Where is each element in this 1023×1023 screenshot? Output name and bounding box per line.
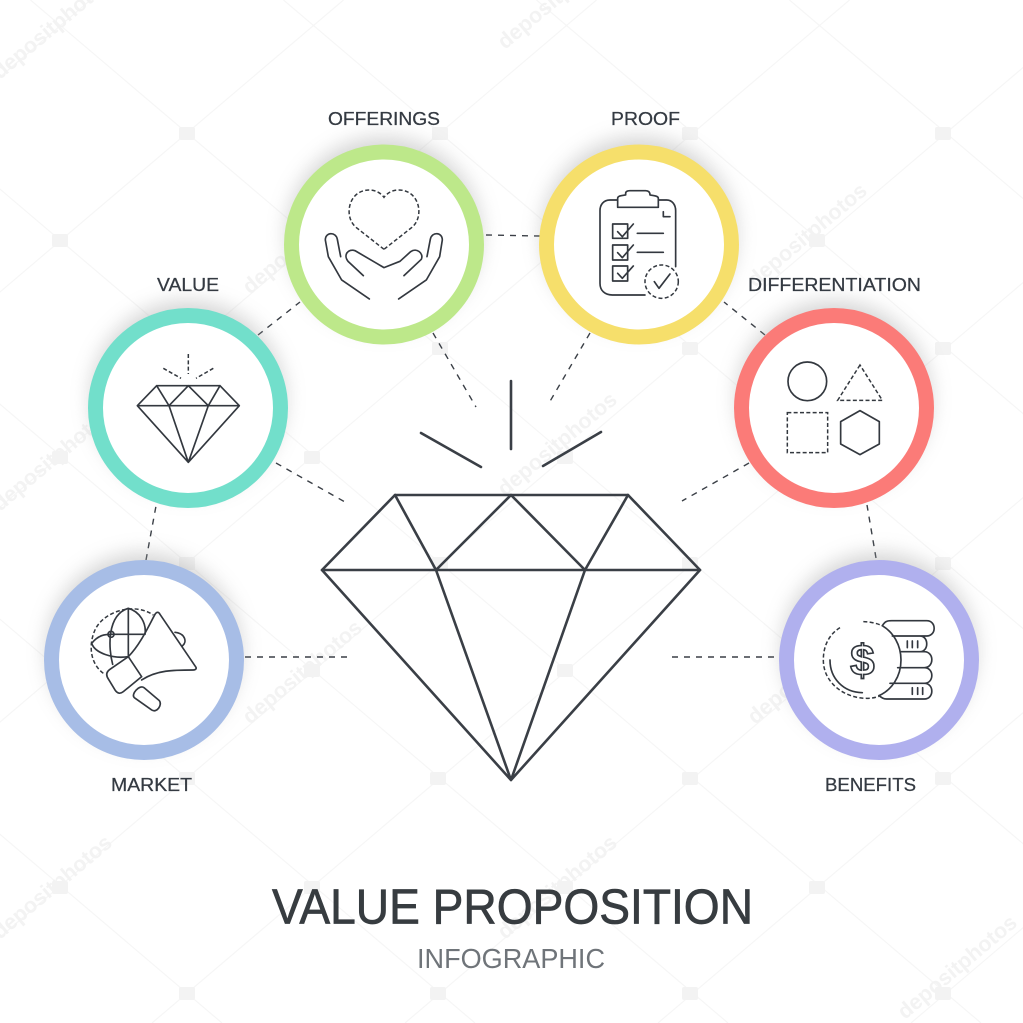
- text: depositphotos: [743, 615, 872, 729]
- circle: value: [91, 301, 285, 500]
- diamond sparkle rays: [421, 381, 601, 467]
- label: proof: PROOF: [611, 109, 680, 129]
- icon: globe and megaphone: [91, 608, 196, 711]
- label: offerings: OFFERINGS: [328, 109, 440, 129]
- circle: proof: [542, 137, 736, 337]
- circle: offerings: [287, 137, 481, 337]
- label: benefits: BENEFITS: [825, 775, 916, 795]
- icon: heart in hands: [325, 190, 442, 299]
- label: differentiation: DIFFERENTIATION: [748, 275, 921, 295]
- circle: benefits: [782, 553, 976, 752]
- text: depositphotos: [238, 615, 367, 729]
- icon: dollar coin and stack: $: [850, 637, 875, 686]
- subtitle: INFOGRAPHIC: [417, 943, 605, 974]
- text: depositphotos: [493, 830, 622, 944]
- text: depositphotos: [743, 178, 872, 292]
- icon: four shapes: [787, 362, 882, 455]
- icon: small diamond: [137, 354, 239, 462]
- circle: differentiation: [737, 301, 931, 500]
- title: VALUE PROPOSITION: [272, 880, 753, 934]
- text: depositphotos: [238, 185, 367, 299]
- label: value: VALUE: [157, 275, 219, 295]
- text: depositphotos: [493, 387, 622, 501]
- text: depositphotos: [893, 910, 1022, 1023]
- dashed connector lines: [146, 235, 876, 657]
- icon: dollar coin and stack: [823, 621, 934, 699]
- icon: clipboard checklist: [600, 191, 678, 298]
- circle: market: [47, 553, 241, 752]
- label: market: MARKET: [111, 775, 192, 795]
- central diamond: [322, 381, 700, 780]
